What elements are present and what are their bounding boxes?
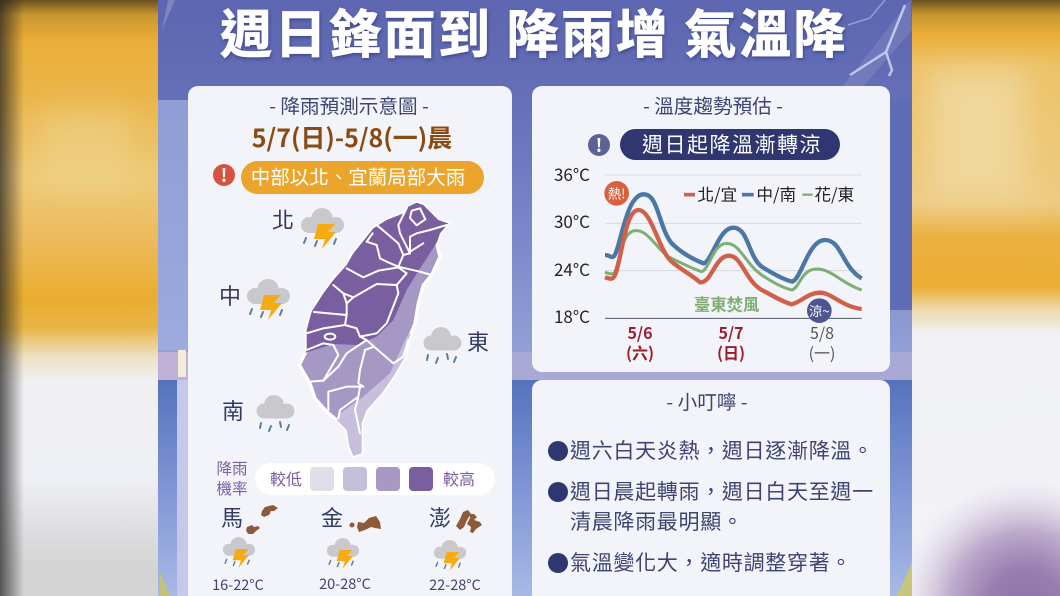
legend: regions xyxy=(684,181,855,205)
axis labels: dates: (六) xyxy=(626,340,654,364)
central poster background xyxy=(158,0,912,596)
reminder: Sunday rain: 清晨降雨最明顯。 xyxy=(570,506,744,536)
axis labels: dates: 5/7 xyxy=(718,320,744,344)
legend: rain probability: 降雨 xyxy=(216,457,248,479)
reminder: Sunday rain xyxy=(548,476,874,536)
map: Taiwan rainfall probability xyxy=(298,201,450,458)
panel heading: rainfall map: - 降雨預測示意圖 - xyxy=(269,90,429,119)
legend: regions: 北/宜 xyxy=(697,181,737,205)
legend: regions: 中/南 xyxy=(756,181,796,205)
icon: navy alert: ! xyxy=(596,132,602,158)
outlying island: Kinmen: 20-28°C xyxy=(319,573,371,594)
icon: south rain xyxy=(256,395,294,431)
label: east: 東 xyxy=(467,325,489,357)
outlying island: Penghu xyxy=(429,501,482,595)
outlying island: Penghu: 22-28°C xyxy=(429,574,481,595)
annotation: Taitung foehn: 臺東焚風 xyxy=(694,292,760,316)
callout: heavy rain warning: 中部以北、宜蘭局部大雨 xyxy=(251,161,465,190)
badge: hot xyxy=(604,181,629,206)
legend: rain probability: 較低 xyxy=(270,466,302,490)
legend: rain probability: 機率 xyxy=(216,477,248,499)
icon: north thunderstorm xyxy=(301,208,344,249)
outlying island: Matsu: 馬 xyxy=(221,501,243,533)
axis labels: temperature: 36°C xyxy=(554,161,590,186)
legend: regions: 花/東 xyxy=(814,181,855,205)
axis labels: dates: 5/6 xyxy=(627,320,653,344)
panel: reminders xyxy=(532,380,890,596)
reminder: Saturday heat: 週六白天炎熱，週日逐漸降溫。 xyxy=(570,435,874,465)
icon: red alert xyxy=(213,162,235,188)
panel heading: temperature: - 溫度趨勢預估 - xyxy=(643,90,783,119)
panel heading: reminders: - 小叮嚀 - xyxy=(666,386,748,415)
reminder: temperature swings: 氣溫變化大，適時調整穿著。 xyxy=(570,547,852,577)
label: central: 中 xyxy=(219,279,241,311)
axis labels: dates: 5/8 xyxy=(810,320,834,344)
badge: cool xyxy=(807,298,832,323)
icon: central thunderstorm xyxy=(247,279,290,320)
blurred left side background xyxy=(0,0,158,596)
outlying island: Matsu xyxy=(212,501,278,595)
line chart: temperature forecast xyxy=(604,175,862,323)
legend: rain probability: 較高 xyxy=(443,466,475,490)
forecast date: 5/7(日)-5/8(一)晨 xyxy=(252,119,452,155)
icon: red alert: ! xyxy=(221,162,227,188)
blurred right side background xyxy=(912,0,1060,596)
legend: rain probability xyxy=(216,457,495,499)
badge: hot: 熱! xyxy=(608,184,625,203)
icon: east rain xyxy=(424,327,462,363)
outlying island: Kinmen: 金 xyxy=(321,501,343,533)
badge: cool: 涼~ xyxy=(809,301,830,320)
axis labels: dates: (一) xyxy=(809,340,835,364)
icon: navy alert xyxy=(588,132,610,158)
label: north: 北 xyxy=(272,203,294,235)
axis labels: dates: (日) xyxy=(717,340,745,364)
axis labels: temperature: 24°C xyxy=(554,256,590,281)
outlying island: Penghu: 澎 xyxy=(429,501,451,533)
axis labels: dates xyxy=(626,320,835,364)
callout: cooling from Sunday: 週日起降溫漸轉涼 xyxy=(642,129,822,159)
axis labels: temperature xyxy=(554,161,590,328)
panel: temperature trend xyxy=(532,86,890,372)
axis labels: temperature: 18°C xyxy=(554,303,590,328)
panel: rainfall forecast map xyxy=(188,86,512,596)
label: south: 南 xyxy=(222,394,244,426)
reminder: Sunday rain: 週日晨起轉雨，週日白天至週一 xyxy=(570,476,874,506)
axis labels: temperature: 30°C xyxy=(554,208,590,233)
outlying island: Matsu: 16-22°C xyxy=(212,574,264,595)
outlying island: Kinmen xyxy=(319,501,381,594)
